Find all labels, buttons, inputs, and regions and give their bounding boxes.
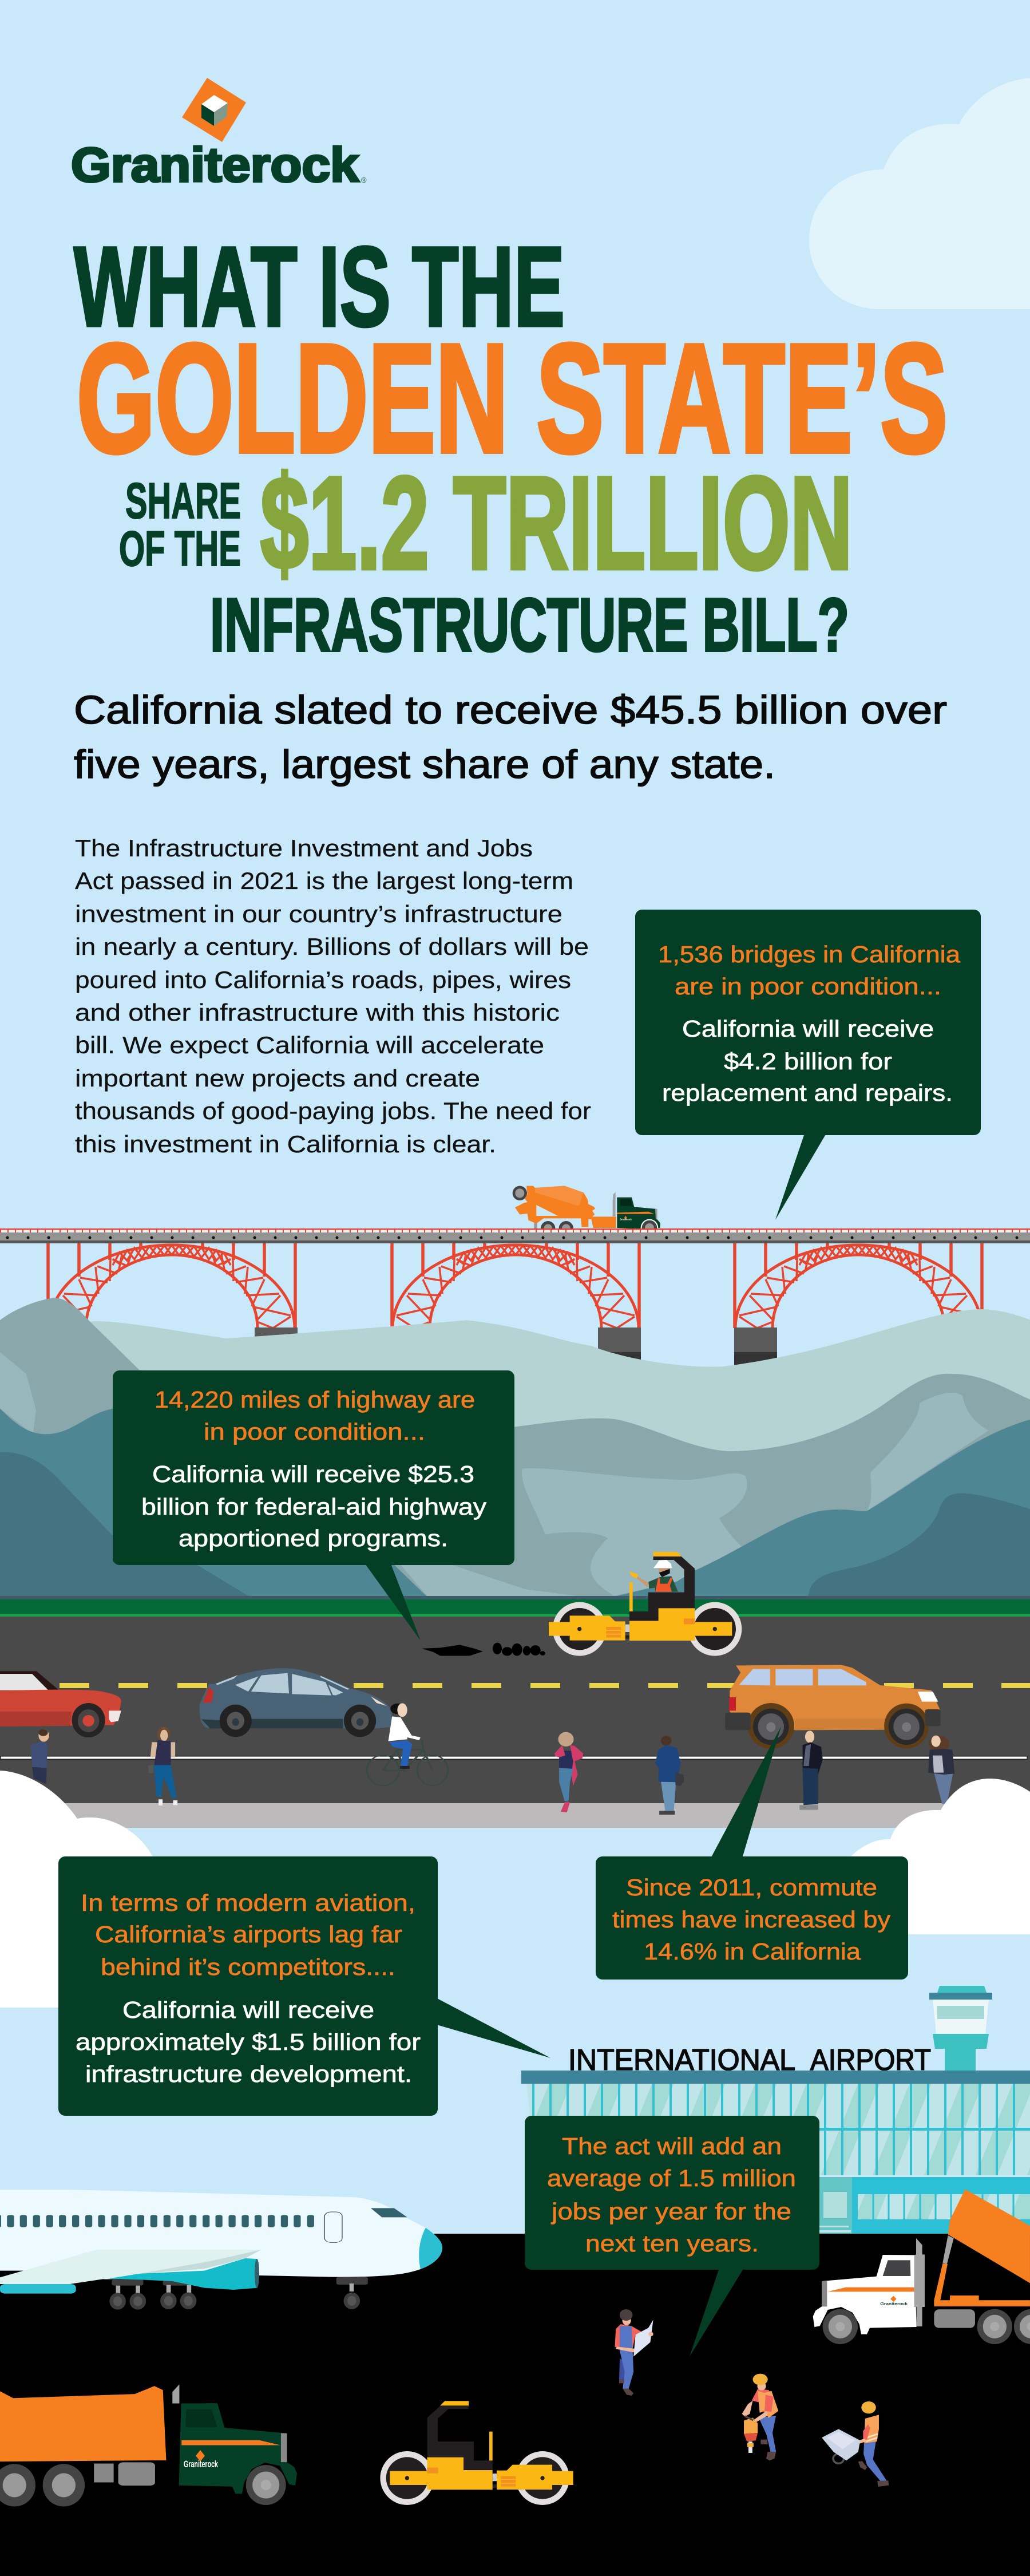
intro paragraph: poured into California’s roads, pipes, wires — [75, 966, 571, 993]
dump truck: right — [813, 2189, 1030, 2344]
terminal base — [819, 2177, 1030, 2238]
worker with blueprint — [615, 2309, 653, 2396]
airport sign: INTERNATIONAL — [568, 2044, 795, 2077]
bridge arches — [48, 1243, 982, 1328]
callout headline: behind it’s competitors.... — [101, 1954, 395, 1980]
cyclist — [367, 1703, 448, 1785]
concrete mixer truck: Graniterock — [620, 1218, 632, 1220]
subheading: five years, largest share of any state. — [74, 742, 775, 787]
callout headline: 14.6% in California — [644, 1938, 861, 1965]
control tower — [929, 1986, 992, 2072]
road roller: highway — [549, 1552, 742, 1656]
dump truck: right: Graniterock — [880, 2302, 908, 2306]
callout pointer — [435, 1997, 550, 2058]
callout: commute — [596, 1726, 908, 1980]
truck logo — [184, 2450, 218, 2470]
title — [74, 223, 948, 667]
callout detail: replacement and repairs. — [662, 1080, 953, 1106]
callout headline — [612, 1874, 891, 1965]
person 7 — [928, 1736, 954, 1804]
callout headline — [81, 1890, 415, 1980]
callout pointer — [775, 1133, 826, 1220]
engine — [108, 2258, 259, 2290]
terminal glass — [526, 2084, 1030, 2175]
terminal roof — [521, 2071, 1030, 2084]
concrete mixer truck — [513, 1186, 660, 1236]
title line 1: WHAT IS THE — [74, 223, 565, 350]
person 6 — [799, 1730, 823, 1810]
intro paragraph: in nearly a century. Billions of dollars will be — [75, 933, 589, 960]
roller body — [549, 1552, 742, 1656]
icon: orange diamond with cube — [182, 78, 246, 142]
orange dump bed — [0, 2386, 166, 2507]
intro paragraph: Act passed in 2021 is the largest long-term — [75, 867, 573, 894]
callout headline — [154, 1386, 475, 1445]
pothole and debris — [422, 1643, 545, 1656]
title small: share: SHARE — [125, 472, 241, 529]
callout headline: 1,536 bridges in California — [658, 941, 960, 967]
truck logo: Graniterock — [184, 2459, 218, 2470]
callout detail: apportioned programs. — [179, 1525, 448, 1551]
sidewalk — [0, 1803, 1030, 1828]
callout detail: billion for federal-aid highway — [141, 1494, 487, 1520]
callout headline: California’s airports lag far — [95, 1921, 402, 1947]
road with median — [0, 1596, 1030, 1828]
door — [324, 2212, 342, 2242]
cockpit window — [371, 2208, 407, 2217]
intro paragraph: important new projects and create — [75, 1065, 480, 1092]
callout box — [525, 2116, 819, 2270]
callout headline: The act will add an — [562, 2133, 782, 2159]
white lane line — [1, 1756, 1027, 1759]
callout headline: average of 1.5 million — [547, 2165, 796, 2191]
pedestrians — [31, 1703, 954, 1815]
callout detail: California will receive $25.3 — [152, 1461, 474, 1487]
callout detail: infrastructure development. — [85, 2061, 412, 2087]
callout headline — [658, 941, 960, 999]
green cab — [172, 2384, 297, 2505]
road roller: bottom — [380, 2401, 573, 2505]
construction workers — [615, 2309, 889, 2487]
callout: bridges — [635, 910, 981, 1220]
callout headline: are in poor condition... — [675, 973, 941, 999]
intro paragraph: and other infrastructure with this historic — [75, 999, 560, 1026]
blue car — [199, 1668, 393, 1737]
callout box — [635, 910, 981, 1135]
callout detail — [141, 1461, 487, 1551]
worker with wheelbarrow — [822, 2401, 889, 2487]
yellow lane dashes — [60, 1683, 1030, 1688]
worker with jackhammer — [742, 2374, 778, 2460]
roller operator — [629, 1560, 678, 1592]
red car — [0, 1671, 121, 1737]
subheading: California slated to receive $45.5 billion over — [74, 688, 947, 732]
cars — [0, 1665, 941, 1749]
callout box — [596, 1856, 908, 1980]
callout: aviation — [58, 1856, 550, 2116]
callout headline: 14,220 miles of highway are — [154, 1386, 475, 1413]
bridge deck — [0, 1232, 1030, 1243]
callout: jobs — [525, 2116, 819, 2357]
logo wordmark: Graniterock — [71, 138, 359, 192]
callout detail — [662, 1016, 953, 1106]
logo: Graniterock — [71, 78, 367, 192]
cloud: top right — [809, 78, 1030, 309]
callout detail: approximately $1.5 billion for — [76, 2029, 421, 2055]
callout detail — [76, 1997, 421, 2087]
landing gear — [109, 2277, 368, 2310]
cloud: left — [0, 1771, 154, 2008]
intro paragraph: bill. We expect California will accelerate — [75, 1032, 544, 1058]
callout headline: In terms of modern aviation, — [81, 1890, 415, 1916]
nose cone — [419, 2228, 442, 2269]
intro paragraph: investment in our country’s infrastructure — [75, 900, 562, 927]
callout pointer — [711, 1726, 781, 1858]
tarmac — [0, 2234, 1030, 2576]
fuselage — [0, 2190, 442, 2279]
callout pointer — [690, 2268, 744, 2357]
callout headline: jobs per year for the — [551, 2198, 791, 2225]
intro paragraph: this investment in California is clear. — [75, 1131, 496, 1157]
callout headline — [547, 2133, 796, 2257]
callout detail: $4.2 billion for — [724, 1048, 892, 1074]
wing — [0, 2250, 262, 2284]
dump truck: bottom left — [0, 2384, 297, 2507]
bridge — [0, 1228, 1030, 1366]
callout: highway — [113, 1370, 514, 1565]
orange SUV — [725, 1665, 941, 1749]
callout box — [58, 1856, 438, 2116]
airport — [521, 1986, 1030, 2238]
airport sign — [568, 2044, 931, 2077]
median grass — [0, 1596, 1030, 1599]
person 1 — [31, 1729, 49, 1784]
airport sign: AIRPORT — [810, 2044, 931, 2077]
callout headline: next ten years. — [585, 2230, 759, 2257]
registered mark: ® — [361, 176, 367, 184]
callout detail: California will receive — [122, 1997, 374, 2023]
bridge piers — [255, 1327, 777, 1366]
airplane — [0, 2190, 442, 2310]
asphalt — [0, 1617, 1030, 1803]
passenger windows — [0, 2215, 314, 2227]
person 4 — [554, 1732, 583, 1812]
intro paragraph: The Infrastructure Investment and Jobs — [75, 835, 533, 862]
subheading — [74, 688, 947, 787]
callout detail: California will receive — [682, 1016, 934, 1042]
callout headline: times have increased by — [612, 1906, 891, 1933]
callout headline: Since 2011, commute — [626, 1874, 877, 1901]
person 2 — [148, 1726, 177, 1805]
callout box — [113, 1370, 514, 1565]
callout pointer: highway — [365, 1564, 421, 1641]
title small: of the: OF THE — [119, 521, 241, 576]
callout headline: in poor condition... — [204, 1419, 425, 1445]
bridge railing — [0, 1228, 1030, 1233]
tail fairing — [0, 2284, 76, 2294]
mountains — [0, 1298, 1030, 1597]
cloud: right — [851, 1779, 1030, 1934]
person 5 — [655, 1736, 684, 1815]
intro paragraph — [75, 835, 591, 1157]
intro paragraph: thousands of good-paying jobs. The need for — [75, 1097, 591, 1124]
